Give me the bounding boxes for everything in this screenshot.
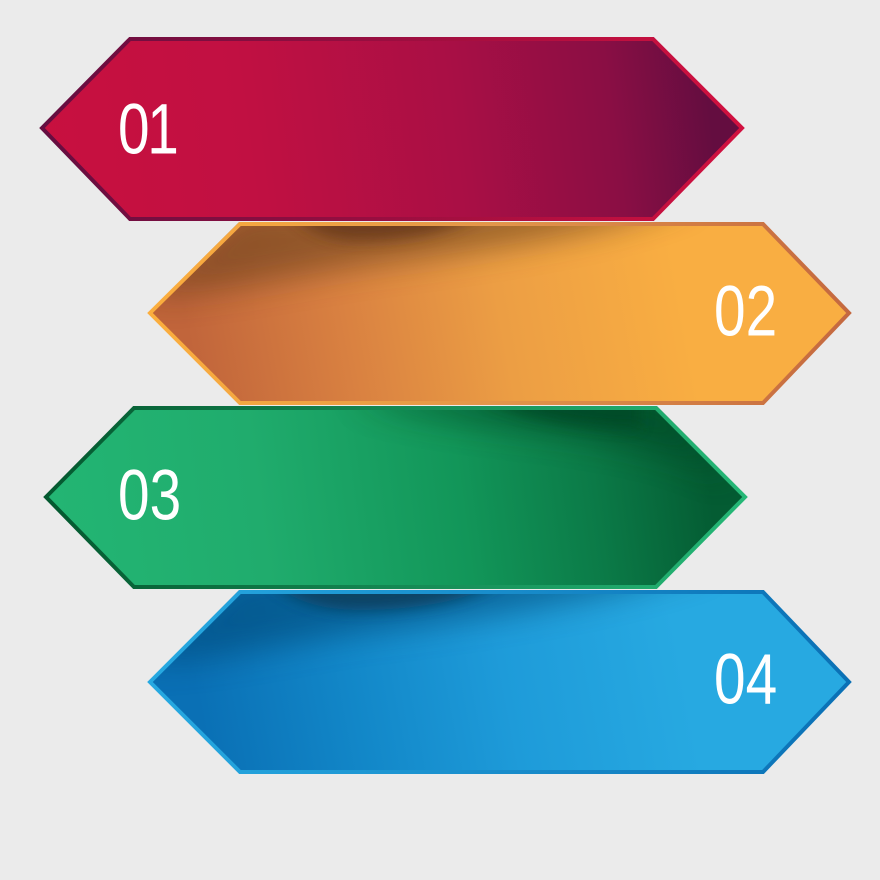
number 02: 02 xyxy=(714,271,777,351)
number 04: 04 xyxy=(714,639,777,719)
shadow on banner 03 xyxy=(372,406,725,474)
banner 01 xyxy=(42,39,742,219)
banner 02 xyxy=(147,222,852,405)
banner 04 xyxy=(147,590,852,774)
shadow on banner 02 xyxy=(160,222,672,309)
banner 03 xyxy=(46,396,745,587)
number 03: 03 xyxy=(118,455,181,535)
number 01: 01 xyxy=(118,89,179,169)
shadow on banner 04 xyxy=(164,590,669,672)
